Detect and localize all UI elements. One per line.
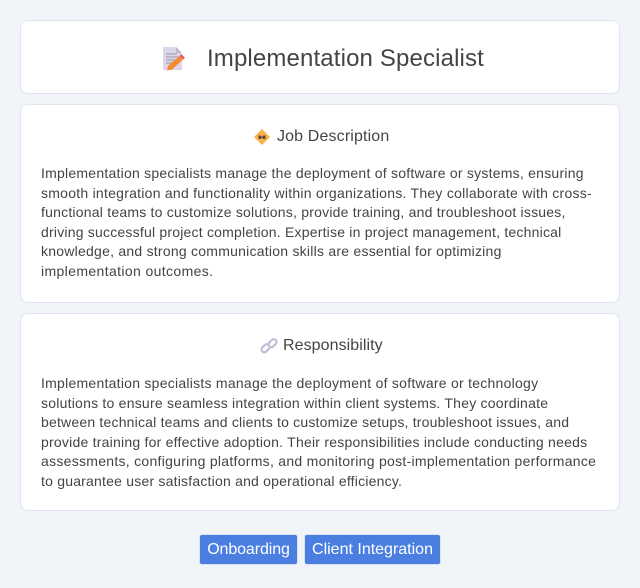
panel: responsibility (20, 313, 620, 511)
tag: client integration (304, 534, 441, 565)
tag: onboarding (199, 534, 298, 565)
icon: diamond sign (254, 129, 270, 145)
tag: client integration: Client Integration (312, 541, 433, 558)
heading: job description: Job Description (277, 128, 389, 145)
text block: job description: implementation outcomes. (41, 262, 213, 278)
tag: onboarding: Onboarding (207, 541, 290, 558)
icon: chain link (260, 338, 278, 354)
panel: job description (20, 104, 620, 303)
text block: responsibility: provide training for effective adoption. Their responsibilities include conducting needs (41, 434, 587, 450)
title: Implementation Specialist (207, 45, 484, 72)
text block: responsibility: to guarantee user satisfaction and operational efficiency. (41, 472, 402, 488)
text block: responsibility: Implementation specialists manage the deployment of software or technology (41, 375, 538, 391)
text block: responsibility: assessments, configuring platforms, and monitoring post-implementation performance (41, 453, 596, 469)
text block: job description (41, 165, 592, 279)
icon: document with pencil (163, 47, 185, 70)
text block: job description: functional teams to customize solutions, provide training, and troubleshoot issues, (41, 204, 566, 220)
text block: responsibility (41, 375, 596, 489)
text block: responsibility: between technical teams and clients to customize setups, troubleshoot issues, and (41, 414, 569, 430)
text block: responsibility: solutions to ensure seamless integration within client systems. They coordinate (41, 394, 548, 410)
text block: job description: Implementation specialists manage the deployment of software or systems, ensuring (41, 165, 584, 181)
heading: responsibility: Responsibility (283, 337, 383, 354)
text block: job description: knowledge, and strong communication skills are essential for optimizing (41, 243, 502, 259)
text block: job description: smooth integration and functionality within organizations. They collaborate with cross- (41, 184, 592, 200)
panel: title card (20, 20, 620, 94)
text block: job description: driving successful project completion. Expertise in project management, technical (41, 224, 561, 240)
